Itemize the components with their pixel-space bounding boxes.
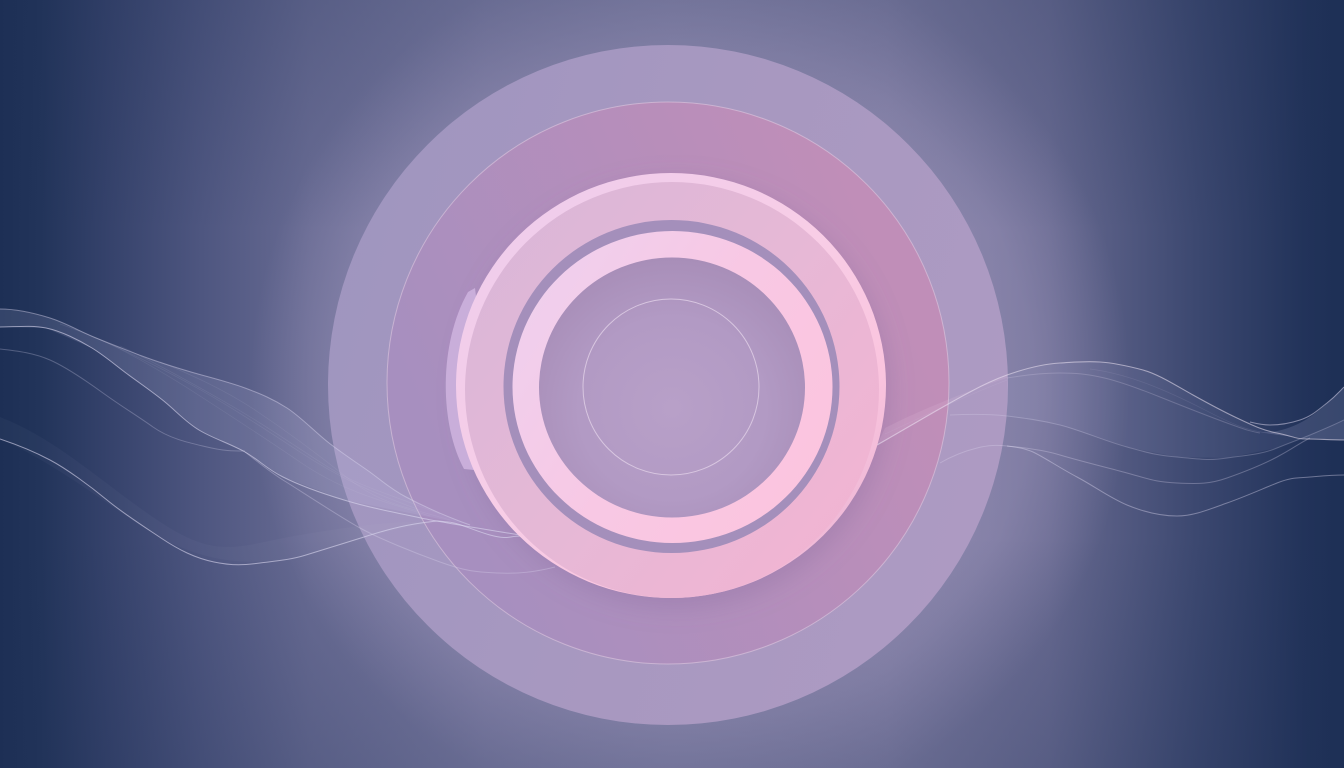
wave strand: main <box>0 326 520 535</box>
right wave ribbon <box>877 362 1344 516</box>
middle disc <box>387 102 949 664</box>
wave strand: tail rise <box>1250 387 1344 425</box>
ribbon veil over disc <box>877 375 1007 445</box>
wave strand: long tail <box>245 452 555 573</box>
left crescent tab <box>446 288 486 470</box>
band shadow <box>462 180 890 608</box>
left wave ribbon <box>0 309 555 573</box>
wave strand: lower <box>940 438 1310 483</box>
band inner groove <box>504 220 840 553</box>
lower ribbon veil <box>0 417 448 562</box>
wave strand: lower thin <box>0 349 245 451</box>
fine filaments <box>885 369 1290 436</box>
wave strand: under top <box>1007 373 1260 433</box>
wave strand: top edge <box>0 309 470 525</box>
ribbon tail veil <box>1260 387 1344 440</box>
wave strand: bottom edge <box>0 439 520 565</box>
wave strand: middle <box>950 414 1344 460</box>
outer band rim <box>456 173 886 598</box>
wave strand: top edge <box>877 362 1344 445</box>
ribbon veil <box>0 309 470 525</box>
outer band face <box>465 182 879 598</box>
outer disc <box>328 45 1008 725</box>
ribbon veil <box>1007 362 1344 458</box>
center disc <box>539 258 805 518</box>
bright ring <box>512 231 832 543</box>
wave strand: bottom edge <box>1007 446 1344 516</box>
inner thin circle <box>583 299 759 475</box>
fine filaments <box>60 324 450 520</box>
